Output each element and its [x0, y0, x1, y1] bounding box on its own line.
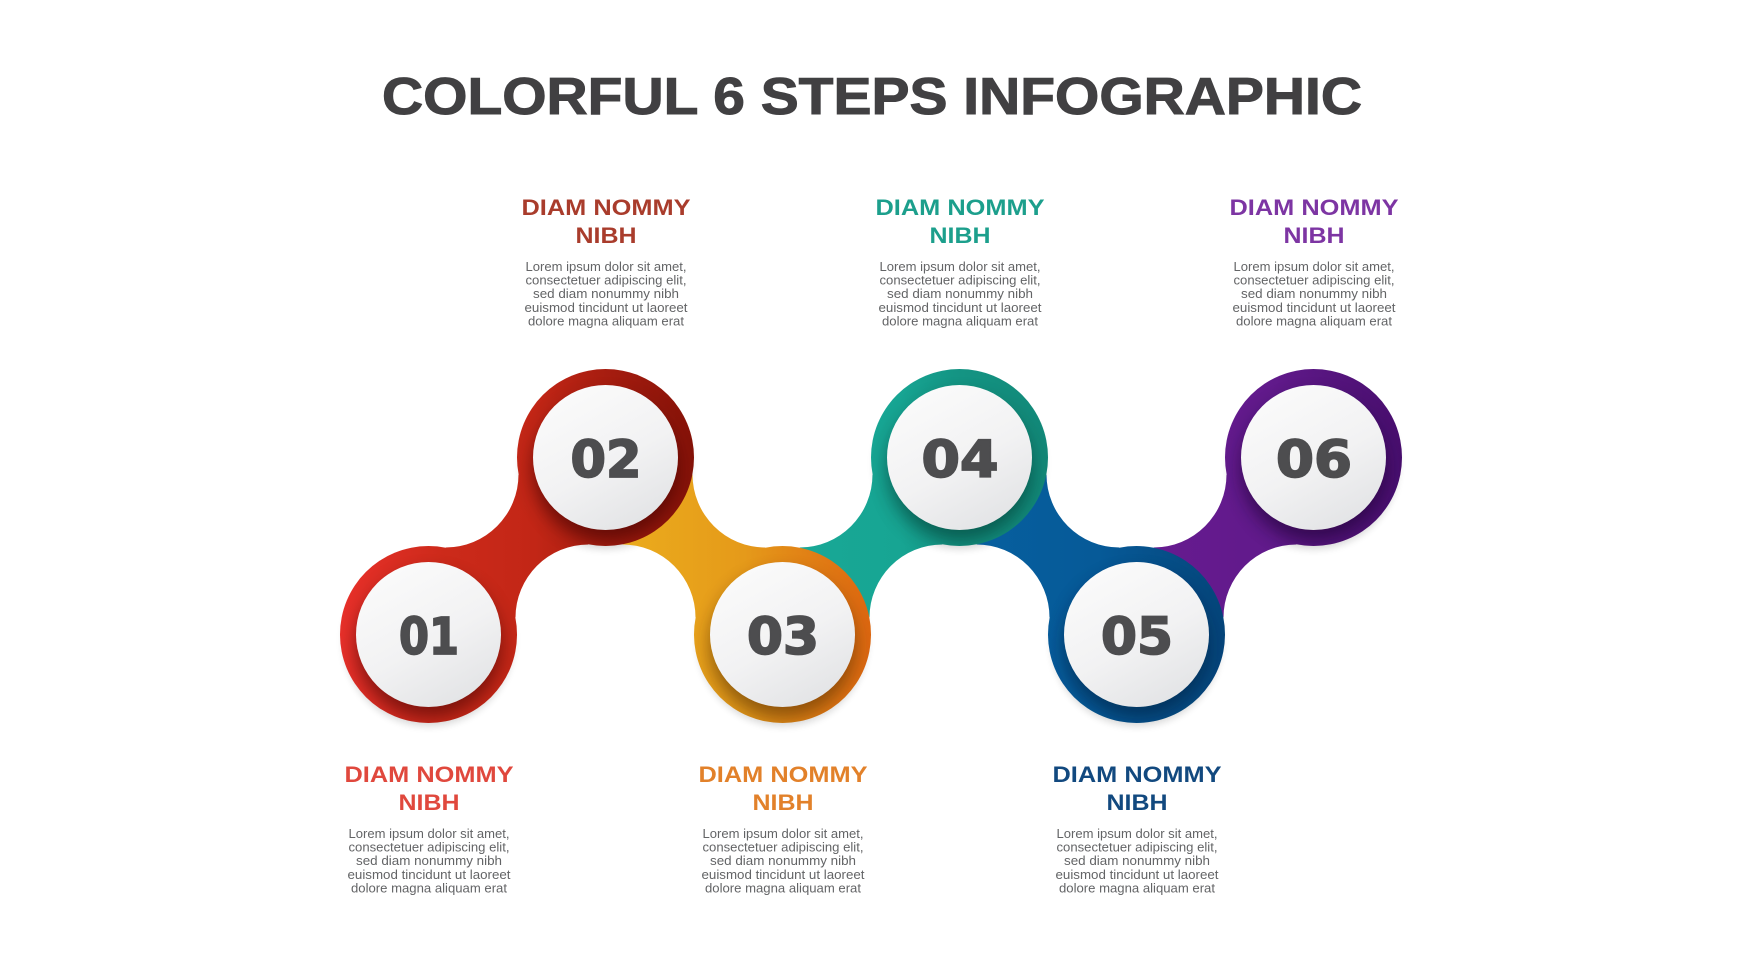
text block: step 04: sed diam nonummy nibh	[887, 286, 1033, 301]
step 02 badge	[533, 385, 678, 530]
text block: step 02: euismod tincidunt ut laoreet	[524, 300, 688, 315]
text block: step 06: euismod tincidunt ut laoreet	[1232, 300, 1396, 315]
text block: step 04: Lorem ipsum dolor sit amet,	[880, 259, 1040, 274]
step 06 badge	[1241, 385, 1386, 530]
text block: step 06: dolore magna aliquam erat	[1236, 314, 1392, 328]
text block: step 05: consectetuer adipiscing elit,	[1056, 840, 1218, 854]
text block: step 03: NIBH	[752, 790, 814, 815]
text block: step 04: consectetuer adipiscing elit,	[880, 272, 1040, 288]
step 02 badge: 02	[570, 431, 642, 490]
text block: step 01: DIAM NOMMY	[344, 762, 514, 787]
text block: step 05: euismod tincidunt ut laoreet	[1056, 867, 1219, 882]
text block: step 06	[1230, 195, 1398, 328]
text block: step 01: sed diam nonummy nibh	[356, 853, 502, 868]
text block: step 02: Lorem ipsum dolor sit amet,	[526, 259, 686, 274]
text block: step 04: DIAM NOMMY	[876, 195, 1044, 220]
text block: step 05	[1052, 762, 1222, 896]
text block: step 02: NIBH	[576, 223, 636, 248]
text block: step 06: NIBH	[1284, 223, 1344, 248]
text block: step 04: euismod tincidunt ut laoreet	[878, 300, 1042, 315]
text block: step 05: DIAM NOMMY	[1052, 762, 1222, 787]
connector and ring: step 05 blue	[976, 474, 1225, 723]
text block: step 05: NIBH	[1106, 790, 1168, 815]
step 05 badge: 05	[1101, 608, 1173, 667]
text block: step 03: euismod tincidunt ut laoreet	[702, 867, 865, 882]
text block: step 03: sed diam nonummy nibh	[710, 853, 856, 868]
text block: step 05: sed diam nonummy nibh	[1064, 853, 1210, 868]
text block: step 05: dolore magna aliquam erat	[1059, 880, 1215, 896]
step 03 badge: 03	[747, 608, 819, 667]
text block: step 04	[876, 195, 1044, 328]
text block: step 01: euismod tincidunt ut laoreet	[348, 867, 511, 882]
text block: step 03	[698, 762, 868, 896]
title: COLORFUL 6 STEPS INFOGRAPHIC	[382, 68, 1362, 126]
step 01 badge	[356, 562, 501, 707]
text block: step 04: NIBH	[930, 223, 990, 248]
text block: step 06: sed diam nonummy nibh	[1241, 286, 1387, 301]
text block: step 02: consectetuer adipiscing elit,	[526, 272, 686, 288]
text block: step 06: Lorem ipsum dolor sit amet,	[1234, 259, 1394, 274]
step 05 badge	[1064, 562, 1209, 707]
connector and ring: step 06 purple	[1154, 369, 1402, 618]
step 04 badge	[887, 385, 1032, 530]
connector and ring: step 04 teal	[800, 369, 1048, 618]
text block: step 01: dolore magna aliquam erat	[351, 880, 507, 896]
step 01 badge: 01	[399, 608, 459, 667]
text block: step 04: dolore magna aliquam erat	[882, 314, 1038, 328]
connector and ring: step 03 orange	[622, 474, 871, 723]
connector and rings: steps 01 and 02 red	[340, 369, 694, 723]
text block: step 02: sed diam nonummy nibh	[533, 286, 679, 301]
step 04 badge: 04	[922, 431, 998, 490]
text block: step 01: NIBH	[398, 790, 460, 815]
text block: step 02	[522, 195, 690, 328]
text block: step 03: consectetuer adipiscing elit,	[702, 840, 864, 854]
text block: step 01: consectetuer adipiscing elit,	[348, 840, 510, 854]
text block: step 05: Lorem ipsum dolor sit amet,	[1056, 826, 1218, 841]
text block: step 06: consectetuer adipiscing elit,	[1234, 272, 1394, 288]
step 06 badge: 06	[1276, 431, 1352, 490]
text block: step 03: dolore magna aliquam erat	[705, 880, 861, 896]
text block: step 02: dolore magna aliquam erat	[528, 314, 684, 328]
text block: step 01	[344, 762, 514, 896]
text block: step 03: Lorem ipsum dolor sit amet,	[702, 826, 864, 841]
text block: step 01: Lorem ipsum dolor sit amet,	[348, 826, 510, 841]
text block: step 03: DIAM NOMMY	[698, 762, 868, 787]
drop shadows under the step circles	[344, 379, 1398, 726]
text block: step 02: DIAM NOMMY	[522, 195, 690, 220]
step 03 badge	[710, 562, 855, 707]
text block: step 06: DIAM NOMMY	[1230, 195, 1398, 220]
